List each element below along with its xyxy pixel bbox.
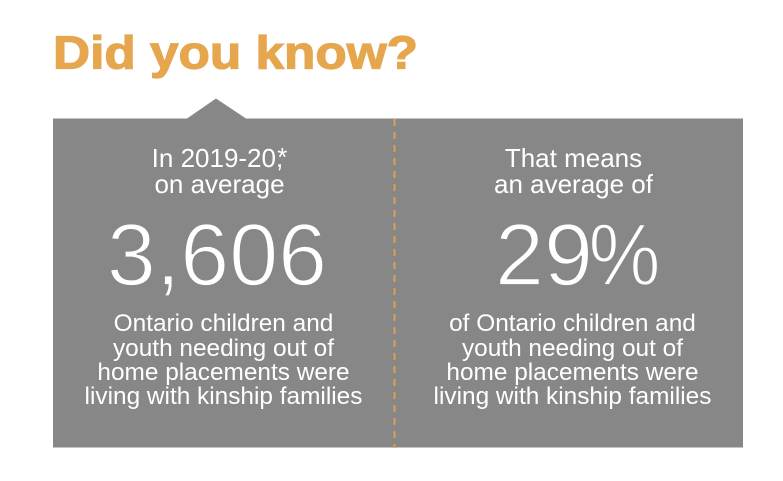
description left: home placements were [97,359,350,386]
panel: grey background with pointer [53,98,743,448]
description right: of Ontario children and [449,310,696,337]
panel: right statistic [434,143,711,410]
big number 3,606: 3,606 [107,205,327,304]
intro text right: That means [505,143,642,173]
description right: youth needing out of [462,335,683,362]
intro text left: In 2019-20, [152,142,287,173]
divider: dashed line [394,119,396,448]
description left: living with kinship families [85,383,362,410]
description left: Ontario children and [114,310,333,337]
big number 29%: % [588,205,660,304]
intro text right: an average of [494,169,654,199]
big number 29%: 29 [495,205,593,304]
intro text left: on average [154,169,285,199]
description left: youth needing out of [113,335,334,362]
intro text left: * [277,142,287,172]
big number 29% [495,205,660,304]
description right: home placements were [446,359,699,386]
panel: left statistic [85,142,362,410]
description right: living with kinship families [434,383,711,410]
title: Did you know? [53,26,418,78]
